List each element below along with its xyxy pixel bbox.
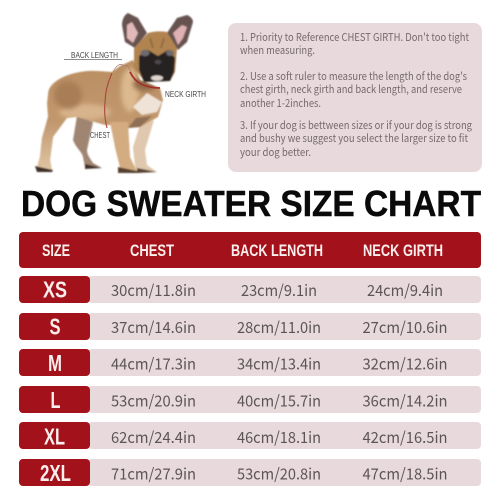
row L	[19, 386, 481, 413]
back length line	[64, 58, 122, 60]
table header: NECK GIRTH	[363, 241, 443, 260]
instruction 2: chest girth, neck girth and back length, and reserve	[240, 81, 462, 97]
rear leg highlight	[37, 117, 62, 170]
row XS: 23cm/9.1in	[241, 279, 317, 301]
table header: BACK LENGTH	[231, 241, 323, 260]
instruction 2	[240, 68, 467, 111]
chest patch	[133, 93, 162, 115]
instruction 1: when measuring.	[240, 42, 315, 58]
strap loop	[113, 64, 131, 72]
instruction 1	[240, 29, 469, 58]
instruction 3: and bushy we suggest you select the larger size to fit	[240, 130, 468, 146]
instruction 2: another 1-2inches.	[240, 95, 321, 111]
row L: 40cm/15.7in	[237, 390, 321, 412]
eyes	[140, 50, 150, 56]
panel: measuring instructions	[228, 23, 482, 172]
row 2XL: 2XL	[40, 460, 71, 486]
row S: 28cm/11.0in	[237, 316, 321, 338]
instruction 3: your dog better.	[240, 144, 311, 160]
row S: S	[50, 314, 60, 340]
row 2XL: 47cm/18.5in	[362, 462, 448, 484]
row XS: XS	[43, 276, 67, 302]
chest label: CHEST	[90, 131, 110, 140]
row 2XL	[19, 459, 481, 486]
paws	[35, 166, 53, 172]
row M: 32cm/12.6in	[362, 352, 448, 374]
row M: 34cm/13.4in	[237, 352, 321, 374]
row 2XL: 53cm/20.8in	[237, 462, 321, 484]
forehead wrinkles	[150, 38, 164, 48]
row L: 36cm/14.2in	[362, 390, 448, 412]
row S: 37cm/14.6in	[111, 316, 196, 338]
row XS: 30cm/11.8in	[111, 279, 196, 301]
nose highlight	[154, 60, 162, 64]
back length label: BACK LENGTH	[71, 51, 118, 60]
far rear leg	[73, 116, 102, 168]
body shading	[54, 68, 157, 120]
instruction 2: 2. Use a soft ruler to measure the length of the dog's	[240, 68, 467, 84]
chin	[151, 75, 163, 81]
dog illustration with measurement labels	[35, 13, 206, 173]
row S	[19, 313, 481, 340]
row XL: 62cm/24.4in	[111, 426, 196, 448]
row XL: XL	[44, 424, 65, 450]
neck girth label: NECK GIRTH	[165, 90, 206, 99]
table header	[19, 232, 481, 268]
ears	[122, 13, 147, 48]
front leg highlight	[110, 122, 137, 172]
chest strap	[105, 73, 112, 128]
table header: SIZE	[42, 241, 70, 260]
row XS: 24cm/9.4in	[367, 279, 443, 301]
head	[134, 31, 177, 82]
row L: L	[50, 387, 60, 413]
row L: 53cm/20.9in	[111, 390, 196, 412]
muzzle mask	[139, 50, 175, 82]
torso and near legs	[37, 60, 163, 172]
row XL	[19, 422, 481, 450]
row M: 44cm/17.3in	[111, 352, 196, 374]
row M: M	[48, 350, 62, 376]
row XS	[19, 276, 481, 303]
row S: 27cm/10.6in	[362, 316, 448, 338]
row XL: 46cm/18.1in	[237, 426, 321, 448]
instruction 1: 1. Priority to Reference CHEST GIRTH. Don't too tight	[240, 29, 469, 45]
dog photo	[35, 13, 193, 173]
instruction 3	[240, 117, 472, 160]
row 2XL: 71cm/27.9in	[111, 462, 196, 484]
far front leg	[133, 120, 157, 172]
neck strap	[130, 72, 160, 88]
row M	[19, 349, 481, 376]
table header: CHEST	[130, 241, 174, 260]
row XL: 42cm/16.5in	[362, 426, 448, 448]
instruction 3: 3. If your dog is bettween sizes or if your dog is strong	[240, 117, 472, 133]
